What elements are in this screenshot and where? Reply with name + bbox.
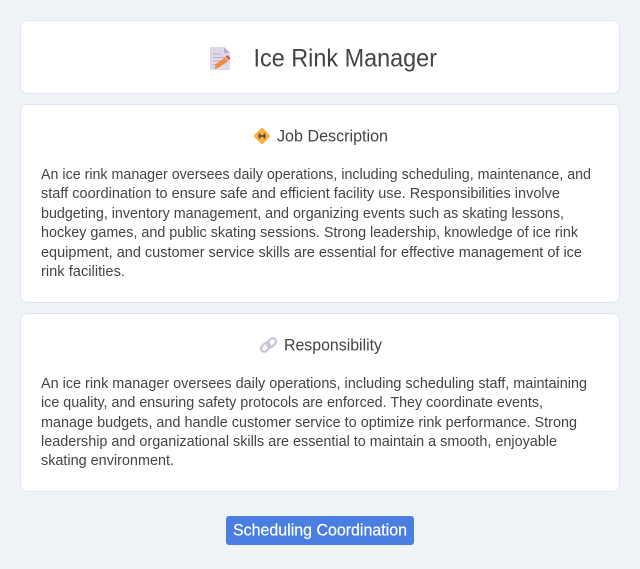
text block: responsibility bbox=[41, 376, 587, 469]
tag button: scheduling coordination bbox=[226, 516, 414, 545]
text block: job description: staff coordination to ensure safe and efficient facility use. Responsibilities involve bbox=[41, 186, 560, 202]
panel: job description bbox=[20, 104, 620, 302]
text block: responsibility: An ice rink manager oversees daily operations, including scheduling staff, maintaining bbox=[41, 376, 587, 392]
text block: responsibility: manage budgets, and handle customer service to optimize rink performance. Strong bbox=[41, 415, 577, 431]
text block: responsibility: skating environment. bbox=[41, 453, 174, 469]
title: Ice Rink Manager bbox=[254, 46, 437, 72]
text block: job description: An ice rink manager oversees daily operations, including scheduling, maintenance, and bbox=[41, 167, 591, 183]
text block: responsibility: ice quality, and ensuring safety protocols are enforced. They coordinate events, bbox=[41, 395, 543, 411]
panel: responsibility bbox=[20, 314, 620, 492]
text block: job description: hockey games, and public skating sessions. Strong leadership, knowledge of ice rink bbox=[41, 225, 579, 241]
panel: title card bbox=[20, 20, 620, 94]
heading: responsibility: Responsibility bbox=[284, 336, 383, 354]
text block: job description: budgeting, inventory management, and organizing events such as skating lessons, bbox=[41, 206, 564, 222]
text block: responsibility: leadership and organizational skills are essential to maintain a smooth, enjoyable bbox=[41, 434, 557, 450]
tag button: scheduling coordination: Scheduling Coordination bbox=[233, 520, 407, 540]
icon: construction diamond sign bbox=[253, 127, 271, 145]
text block: job description: rink facilities. bbox=[41, 264, 125, 280]
icon: chain link bbox=[260, 337, 277, 353]
heading: job description: Job Description bbox=[277, 126, 388, 146]
icon: document with pencil bbox=[210, 47, 230, 70]
text block: job description bbox=[41, 167, 591, 280]
text block: job description: equipment, and customer service skills are essential for effective management of ice bbox=[41, 245, 582, 261]
